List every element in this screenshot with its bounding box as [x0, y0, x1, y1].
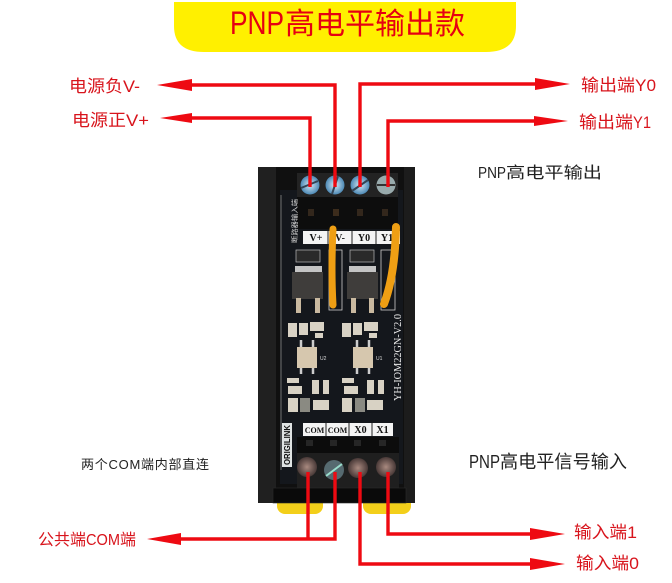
optocouplers: U1 [376, 356, 383, 362]
small components [287, 322, 384, 412]
input pin labels: X0 [354, 425, 367, 436]
input pin labels: X1 [376, 425, 389, 436]
MOSFETs [292, 250, 378, 313]
label: common COM: COM [86, 532, 120, 549]
label: power negative: 电源负 [69, 77, 123, 96]
title banner [174, 2, 516, 52]
heading: PNP output: PNP [478, 165, 506, 182]
input pin labels: COM [328, 426, 348, 435]
title banner: 高电平输出款 [285, 8, 465, 41]
input pin labels: COM [305, 426, 325, 435]
heading: PNP signal input: 高电平信号输入 [500, 452, 627, 472]
arrow: input 1 [388, 472, 565, 540]
optocouplers [297, 340, 383, 374]
lower terminal block [297, 437, 399, 488]
label: input 0: 输入端0 [576, 554, 639, 573]
heading: PNP signal input: PNP [469, 452, 500, 472]
label: output Y1: 输出端 [579, 113, 633, 132]
arrow: output Y0 [360, 78, 570, 187]
label: common COM: 公共端 [38, 531, 86, 549]
label: power positive [72, 111, 149, 130]
label: output Y0: Y0 [635, 76, 656, 95]
device: din rail module [258, 167, 415, 514]
upper terminal block [297, 173, 398, 229]
arrow: power negative V- [157, 79, 335, 187]
output pin labels: V+ [310, 233, 323, 244]
optocouplers: U2 [320, 356, 327, 362]
board model text: YH-IOM22GN-V2.0 [393, 314, 404, 401]
label: output Y1: Y1 [633, 113, 651, 132]
title banner: PNP [230, 5, 284, 41]
arrow: power positive V+ [160, 113, 310, 187]
output pin labels [303, 231, 400, 244]
heading: PNP output [478, 164, 602, 182]
label: power positive: V+ [126, 111, 149, 130]
output pin labels: Y0 [358, 233, 370, 244]
note: COM internally connected: 两个COM端内部直连 [81, 457, 209, 472]
heading: PNP output: 高电平输出 [506, 164, 602, 182]
output pin labels: V- [335, 233, 345, 244]
label: input 1: 输入端1 [574, 523, 637, 542]
side brand text: ORIGILINK [283, 425, 292, 465]
arrow: common COM [147, 472, 335, 545]
label: common COM: 端 [120, 531, 136, 549]
yellow clips [277, 494, 411, 514]
arrow: output Y1 [388, 116, 568, 187]
orange fuses [329, 227, 396, 310]
side silk text upper: 断路器输入端 [290, 199, 299, 243]
label: power negative: V- [123, 77, 140, 96]
input pin labels [303, 423, 393, 436]
label: output Y0: 输出端 [581, 76, 635, 95]
label: common COM [38, 531, 136, 549]
label: power positive: 电源正 [72, 111, 126, 130]
output pin labels: Y1 [381, 233, 393, 244]
circuit board [280, 190, 403, 484]
black housing [258, 167, 415, 503]
lower housing band [273, 488, 406, 503]
arrow: input 0 [360, 472, 565, 570]
label: output Y0 [581, 76, 656, 95]
